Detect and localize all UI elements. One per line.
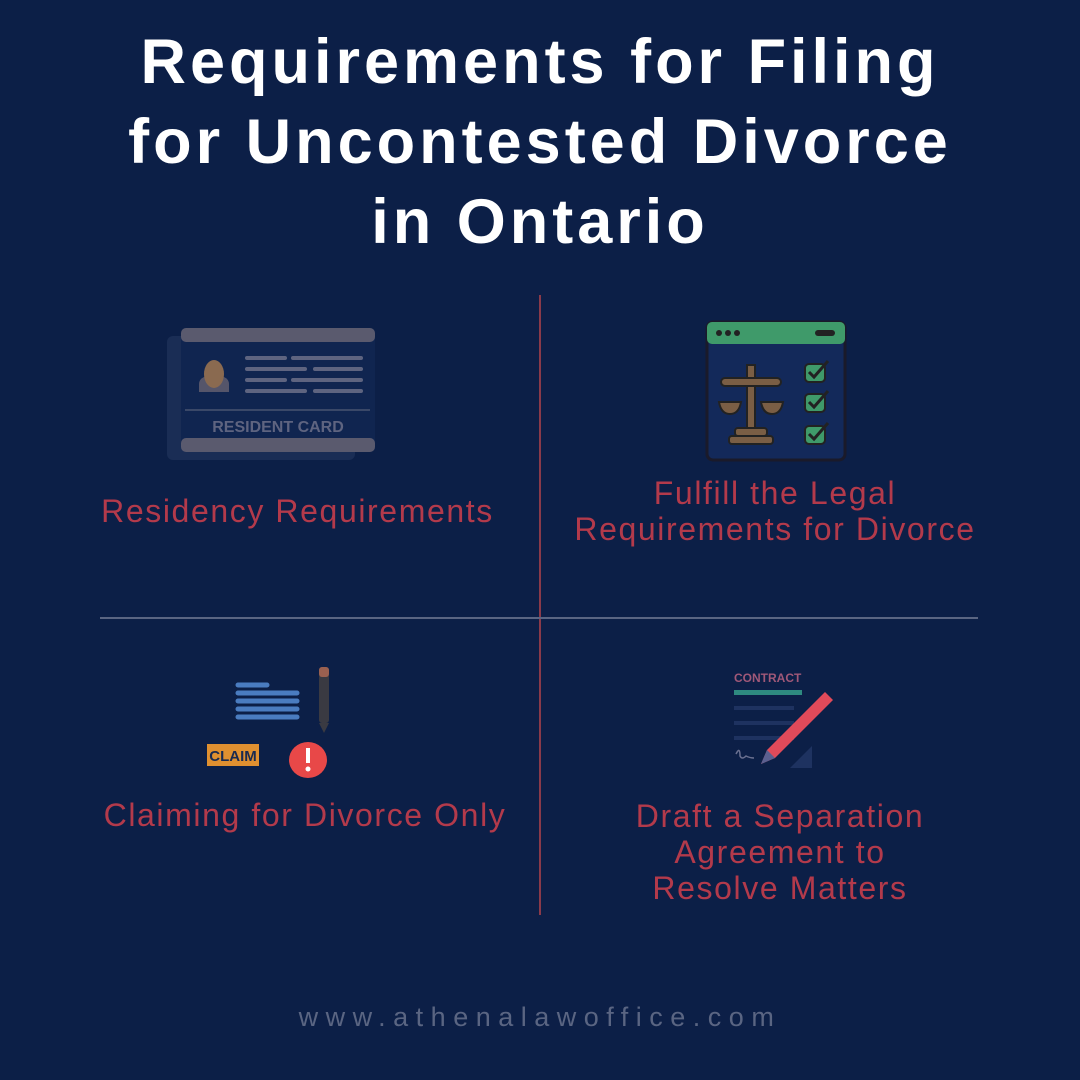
divider horizontal: [100, 617, 978, 619]
icon: claim: CLAIM: [209, 748, 257, 765]
icon: contract: [734, 671, 833, 768]
title: for Uncontested Divorce: [128, 107, 952, 177]
title: Requirements for Filing: [140, 27, 940, 97]
label: separation agreement: Draft a Separation: [636, 798, 924, 834]
title: [128, 27, 952, 257]
label: separation agreement: Resolve Matters: [652, 870, 908, 906]
divider vertical: [539, 295, 541, 915]
label: legal requirements: Requirements for Divorce: [574, 511, 976, 547]
icon: resident card: RESIDENT CARD: [212, 419, 344, 436]
label: claiming: Claiming for Divorce Only: [104, 797, 506, 833]
label: residency: Residency Requirements: [101, 493, 494, 529]
label: legal requirements: Fulfill the Legal: [654, 475, 896, 511]
icon: contract: CONTRACT: [734, 671, 802, 685]
title: in Ontario: [371, 187, 709, 257]
label: legal requirements: [574, 475, 976, 547]
icon: claim: [207, 667, 329, 778]
label: separation agreement: Agreement to: [674, 834, 886, 870]
icon: resident card: [167, 328, 375, 460]
icon: legal scales checklist: [706, 320, 846, 462]
footer url: www.athenalawoffice.com: [299, 1002, 781, 1032]
label: separation agreement: [636, 798, 924, 906]
